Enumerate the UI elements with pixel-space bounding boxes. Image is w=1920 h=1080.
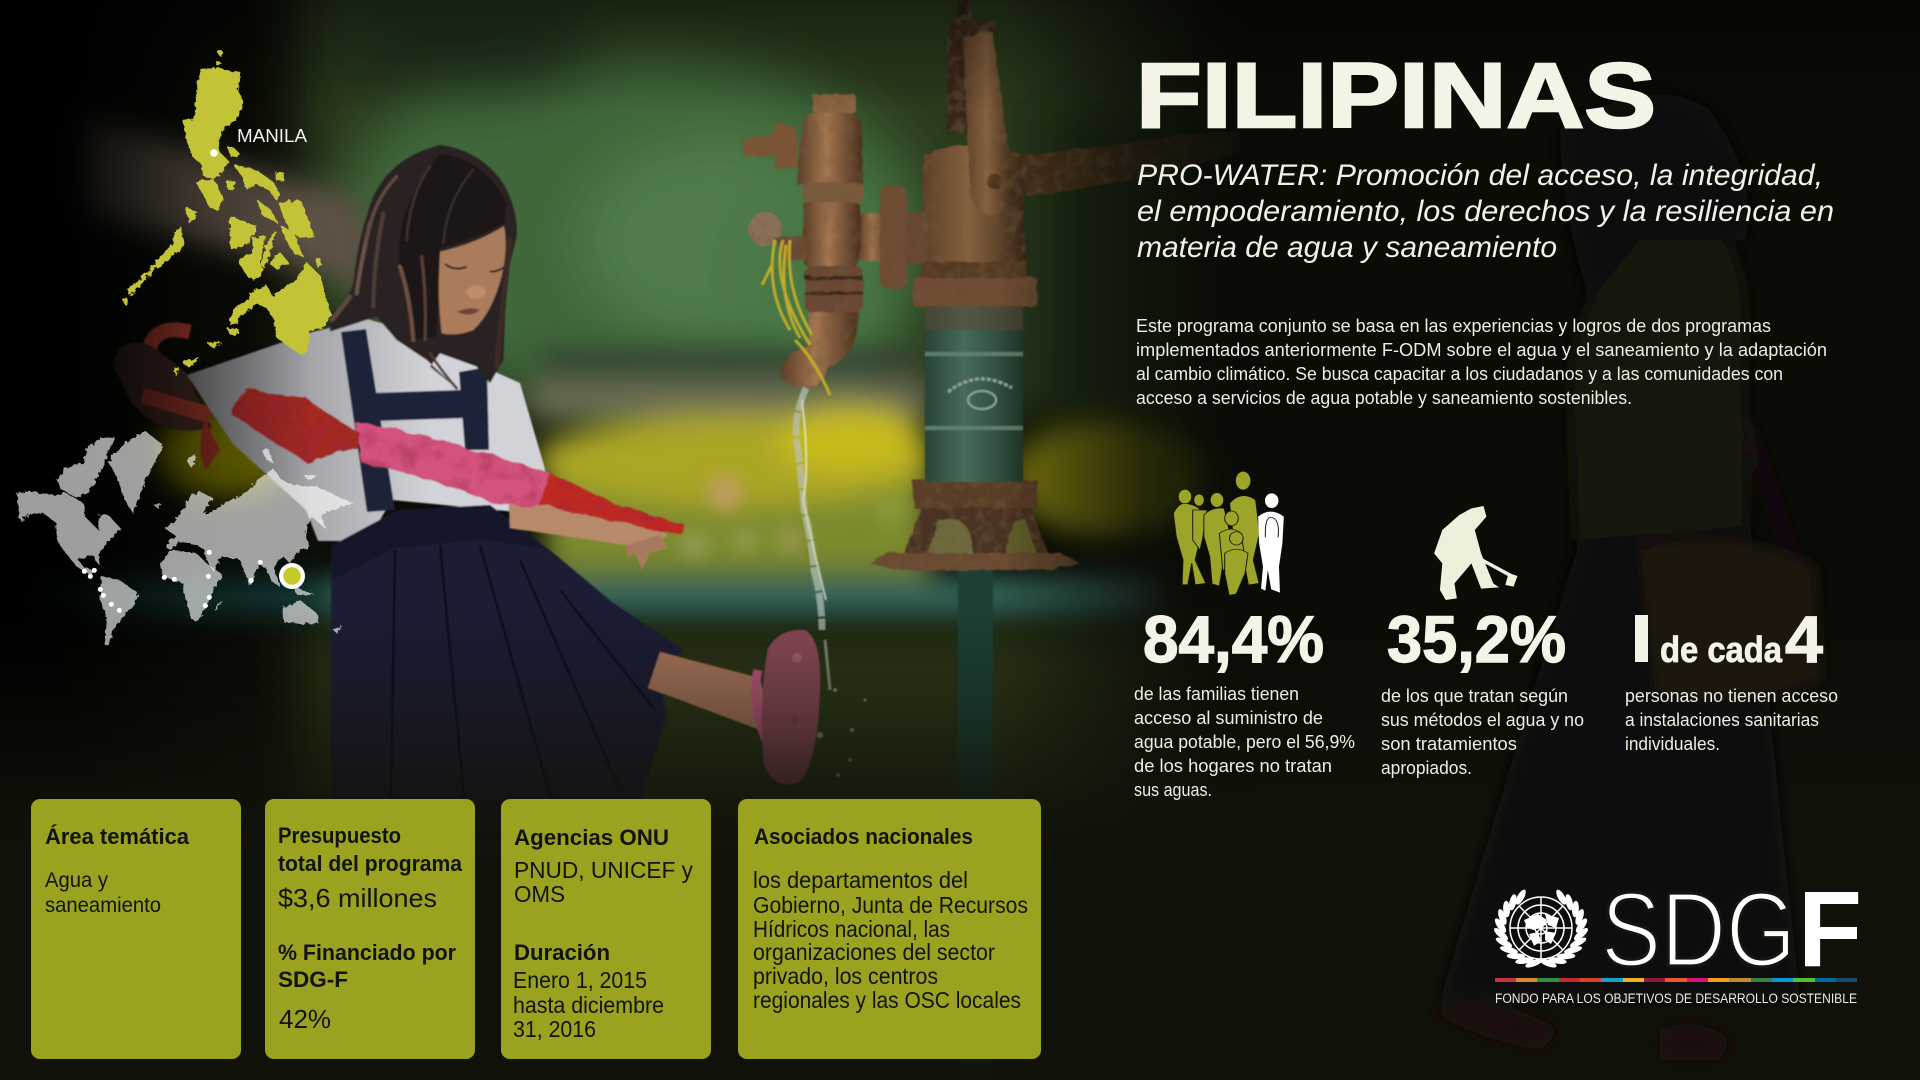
stat: 84,4%: acceso al suministro de bbox=[1134, 708, 1323, 728]
running water bbox=[796, 388, 826, 630]
fringe bbox=[399, 153, 507, 340]
stat: 84,4%: 84,4% bbox=[1143, 602, 1324, 676]
background figure: girl walking bbox=[1430, 94, 1822, 1060]
panel: asociados nacionales: Gobierno, Junta de Recursos bbox=[753, 892, 1028, 918]
panel: asociados nacionales: los departamentos del bbox=[753, 867, 968, 893]
label: Manila: MANILA bbox=[237, 126, 307, 146]
pump base bbox=[870, 480, 1080, 570]
panel: presupuesto: 42% bbox=[279, 1004, 331, 1034]
subtitle: PRO-WATER: Promoción del acceso, la integridad, bbox=[1137, 159, 1823, 192]
stat: 1 de cada 4: personas no tienen acceso bbox=[1625, 686, 1838, 706]
stat: 35,2% bbox=[1381, 602, 1584, 778]
panel: presupuesto: $3,6 millones bbox=[278, 883, 437, 913]
stat: 35,2%: 35,2% bbox=[1387, 602, 1566, 676]
intro paragraph bbox=[1136, 316, 1827, 408]
logo: SDG Fund bbox=[1492, 868, 1862, 1006]
stat: 1 de cada 4 bbox=[1625, 602, 1838, 754]
panel: área temática bbox=[31, 799, 241, 1059]
yellow twine bbox=[762, 240, 830, 395]
stat: 35,2%: sus métodos el agua y no bbox=[1381, 710, 1584, 730]
panel: asociados nacionales bbox=[738, 799, 1041, 1059]
photo: hand pump bbox=[743, 0, 1240, 1080]
panel: asociados nacionales: privado, los centros bbox=[753, 963, 938, 989]
panel: agencias ONU y duración: hasta diciembre bbox=[513, 992, 664, 1018]
subtitle bbox=[1137, 159, 1834, 264]
map: Philippines highlight marker bbox=[279, 563, 305, 589]
stat: 84,4%: agua potable, pero el 56,9% bbox=[1134, 732, 1355, 752]
pump body bbox=[913, 145, 1037, 307]
icon: UN emblem bbox=[1492, 888, 1590, 969]
intro paragraph: Este programa conjunto se basa en las experiencias y logros de dos programas bbox=[1136, 316, 1771, 336]
panel: presupuesto: % Financiado por bbox=[278, 940, 456, 965]
panel: presupuesto bbox=[265, 799, 475, 1059]
panel: área temática: Agua y bbox=[45, 869, 108, 892]
photo: girl with umbrella bbox=[113, 145, 866, 900]
stat: 35,2%: son tratamientos bbox=[1381, 734, 1517, 754]
panel: asociados nacionales: regionales y las OSC locales bbox=[753, 987, 1021, 1013]
stat: 1 de cada 4: individuales. bbox=[1625, 734, 1720, 754]
umbrella handle and hand bbox=[113, 330, 220, 470]
stat: 1 de cada 4: a instalaciones sanitarias bbox=[1625, 710, 1819, 730]
umbrella bbox=[230, 388, 686, 535]
hair strands bbox=[332, 167, 510, 388]
icon: family silhouettes bbox=[1173, 471, 1284, 595]
hair back bbox=[330, 145, 517, 388]
pump arm bbox=[1010, 130, 1240, 197]
title: FILIPINAS bbox=[1136, 45, 1656, 147]
panel: presupuesto: SDG-F bbox=[278, 967, 348, 992]
raised leg bbox=[648, 652, 772, 735]
panel: asociados nacionales: organizaciones del sector bbox=[753, 939, 995, 965]
pump lever bbox=[947, 0, 1016, 215]
stat: 84,4%: de las familias tienen bbox=[1134, 684, 1299, 704]
logo caption: FONDO PARA LOS OBJETIVOS DE DESARROLLO SOSTENIBLE bbox=[1495, 991, 1857, 1006]
stat: 84,4%: sus aguas. bbox=[1134, 780, 1212, 800]
spout bbox=[743, 94, 864, 387]
shirt bbox=[187, 319, 548, 541]
panel: agencias ONU y duración: 31, 2016 bbox=[513, 1016, 596, 1042]
arm and hand bbox=[508, 490, 668, 570]
pump pole bbox=[958, 565, 993, 1080]
panel: presupuesto: total del programa bbox=[278, 851, 463, 876]
panel: agencias ONU y duración: PNUD, UNICEF y bbox=[514, 857, 693, 883]
map: Philippines bbox=[123, 52, 330, 375]
stat: 35,2%: apropiados. bbox=[1381, 758, 1472, 778]
skirt bbox=[331, 505, 683, 900]
stat: 84,4% bbox=[1134, 602, 1355, 800]
spout connector bbox=[858, 186, 927, 289]
icon: person working with hoe bbox=[1434, 506, 1517, 600]
intro paragraph: implementados anteriormente F-ODM sobre el agua y el saneamiento y la adaptación bbox=[1136, 340, 1827, 360]
panel: agencias ONU y duración: Enero 1, 2015 bbox=[513, 967, 647, 993]
subtitle: materia de agua y saneamiento bbox=[1137, 231, 1557, 264]
intro paragraph: acceso a servicios de agua potable y saneamiento sostenibles. bbox=[1136, 388, 1632, 408]
panel: agencias ONU y duración: OMS bbox=[514, 881, 565, 907]
stat: 35,2%: de los que tratan según bbox=[1381, 686, 1568, 706]
subtitle: el empoderamiento, los derechos y la resiliencia en bbox=[1137, 195, 1834, 228]
colour bar bbox=[1495, 978, 1857, 982]
stat: 1 de cada 4: de cada bbox=[1660, 629, 1783, 670]
panel: presupuesto: Presupuesto bbox=[278, 823, 401, 848]
wordmark: SDG: SDG bbox=[1601, 871, 1796, 989]
pump cylinder bbox=[925, 306, 1023, 482]
wordmark: F: F bbox=[1798, 868, 1862, 989]
stat: 84,4%: de los hogares no tratan bbox=[1134, 756, 1332, 776]
map: world bbox=[17, 431, 353, 647]
panel: área temática: saneamiento bbox=[45, 894, 161, 917]
head bbox=[330, 145, 517, 388]
face bbox=[439, 226, 506, 334]
stat: 1 de cada 4: 4 bbox=[1785, 602, 1823, 676]
sandal bbox=[756, 630, 820, 785]
panel: asociados nacionales: Asociados nacionales bbox=[754, 824, 973, 849]
panel: área temática: Área temática bbox=[45, 824, 190, 849]
panel: agencias ONU y duración: Agencias ONU bbox=[514, 825, 669, 850]
water splash bbox=[817, 640, 866, 777]
panel: agencias ONU y duración: Duración bbox=[514, 940, 610, 965]
pinafore straps bbox=[341, 329, 489, 512]
panel: agencias ONU y duración bbox=[501, 799, 711, 1059]
map: Manila marker bbox=[210, 149, 218, 157]
panel: asociados nacionales: Hídricos nacional, las bbox=[753, 916, 950, 942]
intro paragraph: al cambio climático. Se busca capacitar a los ciudadanos y a las comunidades con bbox=[1136, 364, 1783, 384]
